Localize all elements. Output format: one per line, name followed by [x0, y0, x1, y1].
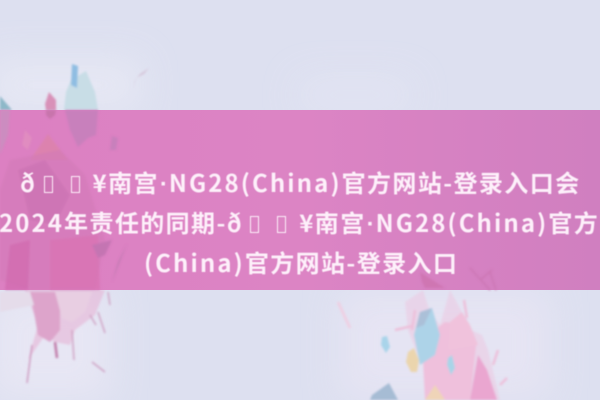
lower left splash	[0, 290, 110, 383]
headline line 1: ð ¥南宫·NG28(China)官方网站-登录入口会	[20, 164, 581, 199]
pale glow areas	[0, 60, 550, 400]
pink band	[0, 110, 600, 290]
band shadows of artwork	[0, 110, 496, 290]
upper left crystals	[0, 64, 149, 110]
lower centre splash	[338, 290, 507, 400]
headline line 3: (China)官方网站-登录入口	[144, 244, 458, 279]
